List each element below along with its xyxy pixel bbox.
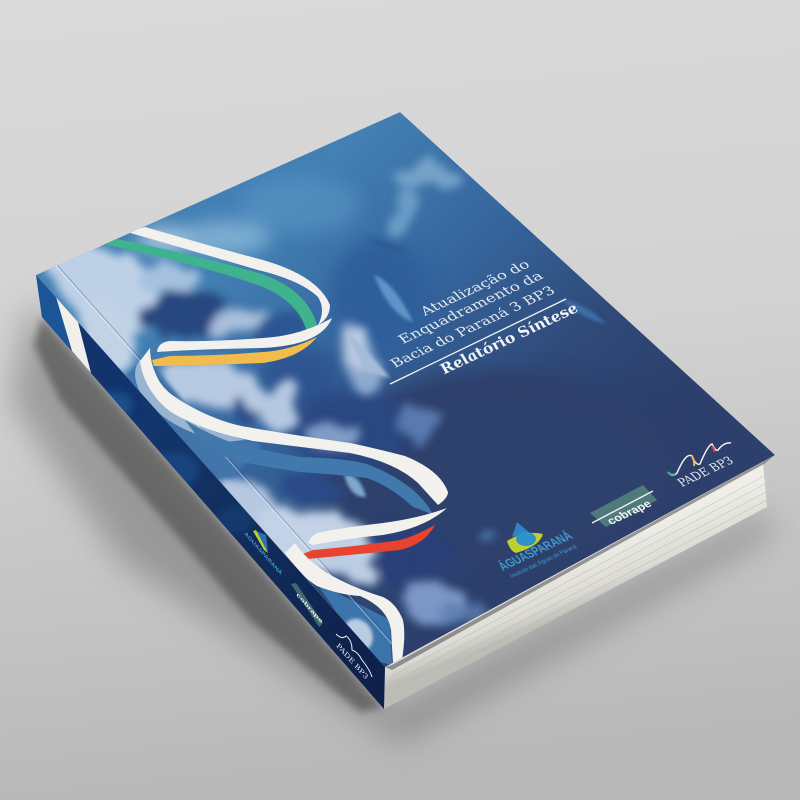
hinge crease: [55, 265, 400, 653]
white ribbon 1: [127, 227, 330, 325]
logo: PADE BP3: PADE BP3: [675, 455, 737, 490]
spine logo: Águas Paraná: AGUASPARANÁ: [243, 531, 283, 577]
logo: Águas Paraná: [495, 522, 579, 579]
spine: [36, 275, 385, 709]
spine logo: cobrape: [291, 583, 323, 627]
white ribbon 4: [308, 508, 447, 545]
blue ribbon: upper: [185, 420, 433, 515]
white ribbon 2: [157, 318, 332, 352]
logo: Águas Paraná: ÁGUASPARANÁ: [495, 529, 576, 574]
logo: Águas Paraná: Instituto das Águas do Paraná: [508, 542, 579, 579]
translucent ribbon shadows: [135, 360, 245, 442]
spine logo: PADE BP3: [335, 634, 372, 681]
white ribbon 5: [285, 543, 404, 664]
page block: [384, 455, 775, 709]
title lines: Enquadramento da: [395, 269, 547, 347]
title lines: Atualização do: [416, 258, 533, 319]
logo: cobrape: [590, 485, 657, 527]
spine white stripe: [56, 297, 91, 373]
logo: PADE BP3: [668, 443, 737, 490]
red ribbon: [300, 525, 435, 559]
spine logo: PADE BP3: PADE BP3: [335, 641, 370, 681]
subtitle: Relatório Síntese: [435, 300, 582, 377]
cover photo background: [26, 112, 775, 667]
cover title block: [387, 258, 582, 384]
title rule: [390, 299, 566, 384]
blue patch under lower ribbon: [316, 582, 392, 665]
blue band left of ribbon: [127, 358, 262, 478]
book cast shadow: [10, 300, 772, 745]
title lines: Bacia do Paraná 3 BP3: [387, 284, 559, 371]
green ribbon: [102, 238, 318, 332]
yellow ribbon: [152, 337, 317, 366]
logo: cobrape: cobrape: [604, 498, 655, 527]
white ribbon 3: [140, 348, 448, 505]
spine logo: cobrape: cobrape: [295, 592, 323, 625]
fish silhouettes: [344, 238, 606, 497]
front cover: [26, 112, 775, 667]
